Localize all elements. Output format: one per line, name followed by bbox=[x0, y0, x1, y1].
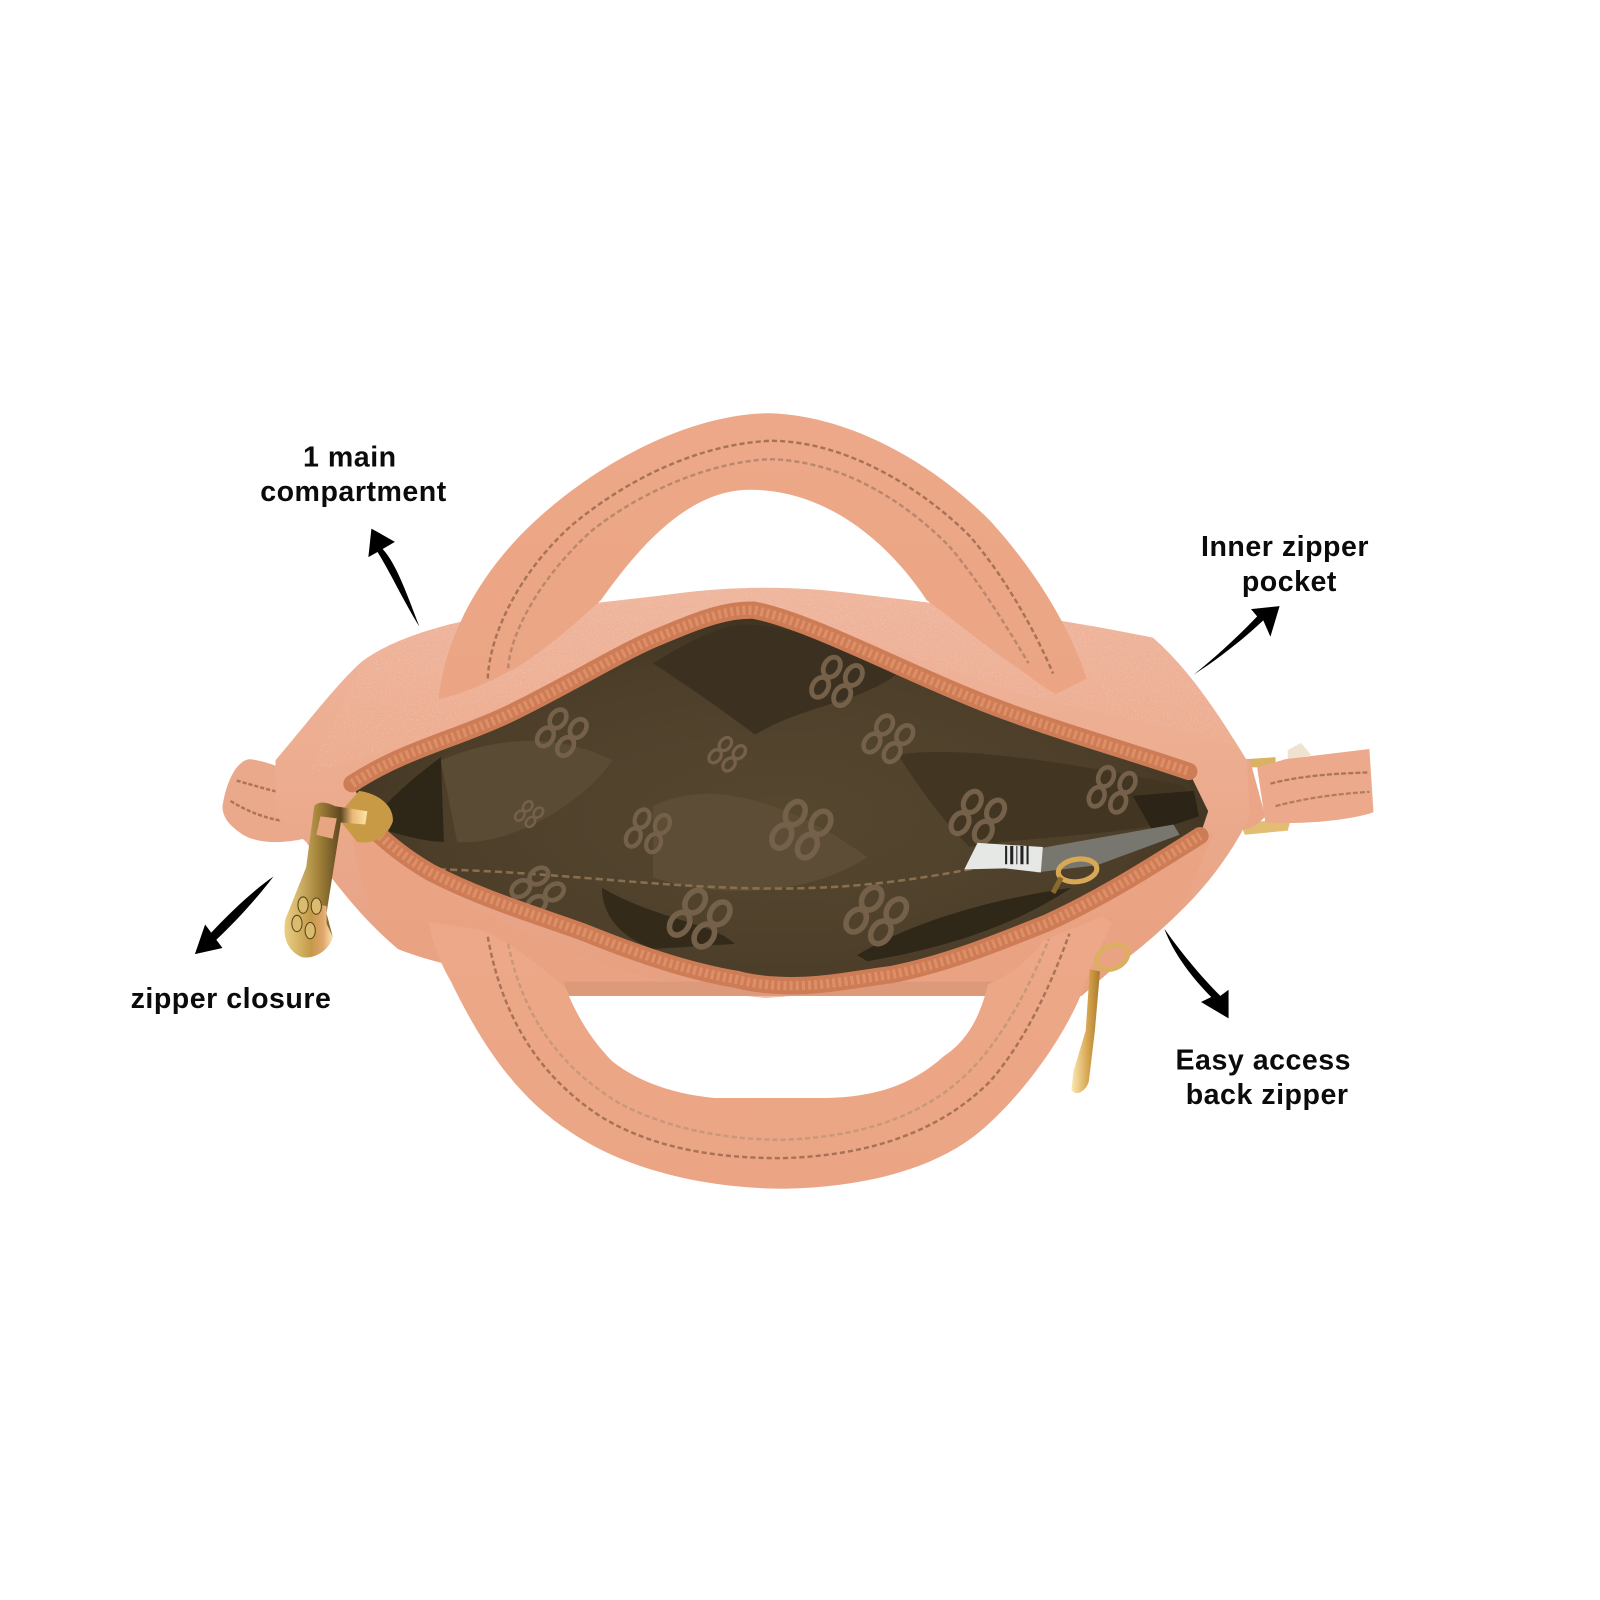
left strap tab bbox=[222, 759, 304, 842]
label: 1 main compartment bbox=[260, 441, 447, 508]
top handle bbox=[439, 413, 1087, 699]
lining logo pattern bbox=[508, 651, 1138, 954]
lining interior bbox=[352, 610, 1208, 986]
label: easy access back zipper bbox=[1176, 1044, 1351, 1111]
arrow: 1 main compartment bbox=[368, 529, 419, 627]
right strap tab with rings bbox=[1222, 743, 1373, 835]
label: inner zipper pocket: Inner zipper bbox=[1201, 531, 1369, 563]
body sparkle texture bbox=[306, 588, 1235, 776]
back zipper pull bbox=[1071, 940, 1132, 1093]
main zipper pull bbox=[284, 791, 393, 957]
lower strip behind handle opening bbox=[563, 982, 995, 996]
lining seam stitching bbox=[439, 867, 980, 889]
label: inner zipper pocket bbox=[1201, 531, 1369, 598]
zipper tape bbox=[352, 610, 1200, 986]
label: inner zipper pocket: pocket bbox=[1242, 566, 1337, 598]
bag lower lip shading bbox=[352, 816, 1214, 998]
bottom handle stitching bbox=[488, 934, 1069, 1158]
lining folds bbox=[380, 624, 1199, 961]
bottom handle bbox=[429, 916, 1112, 1189]
bag body bbox=[276, 588, 1250, 996]
label: easy access back zipper: back zipper bbox=[1186, 1079, 1348, 1111]
label: 1 main compartment: 1 main bbox=[303, 441, 397, 473]
arrow: zipper closure bbox=[195, 877, 273, 954]
arrow: easy access back zipper bbox=[1164, 929, 1229, 1018]
arrow: inner zipper pocket bbox=[1194, 606, 1280, 674]
inner pocket label tag bbox=[964, 824, 1180, 872]
top handle stitching bbox=[488, 441, 1053, 679]
label: easy access back zipper: Easy access bbox=[1176, 1044, 1351, 1076]
label: 1 main compartment: compartment bbox=[260, 476, 447, 508]
label: zipper closure: zipper closure bbox=[131, 983, 331, 1015]
inner zipper ring bbox=[1053, 857, 1098, 893]
